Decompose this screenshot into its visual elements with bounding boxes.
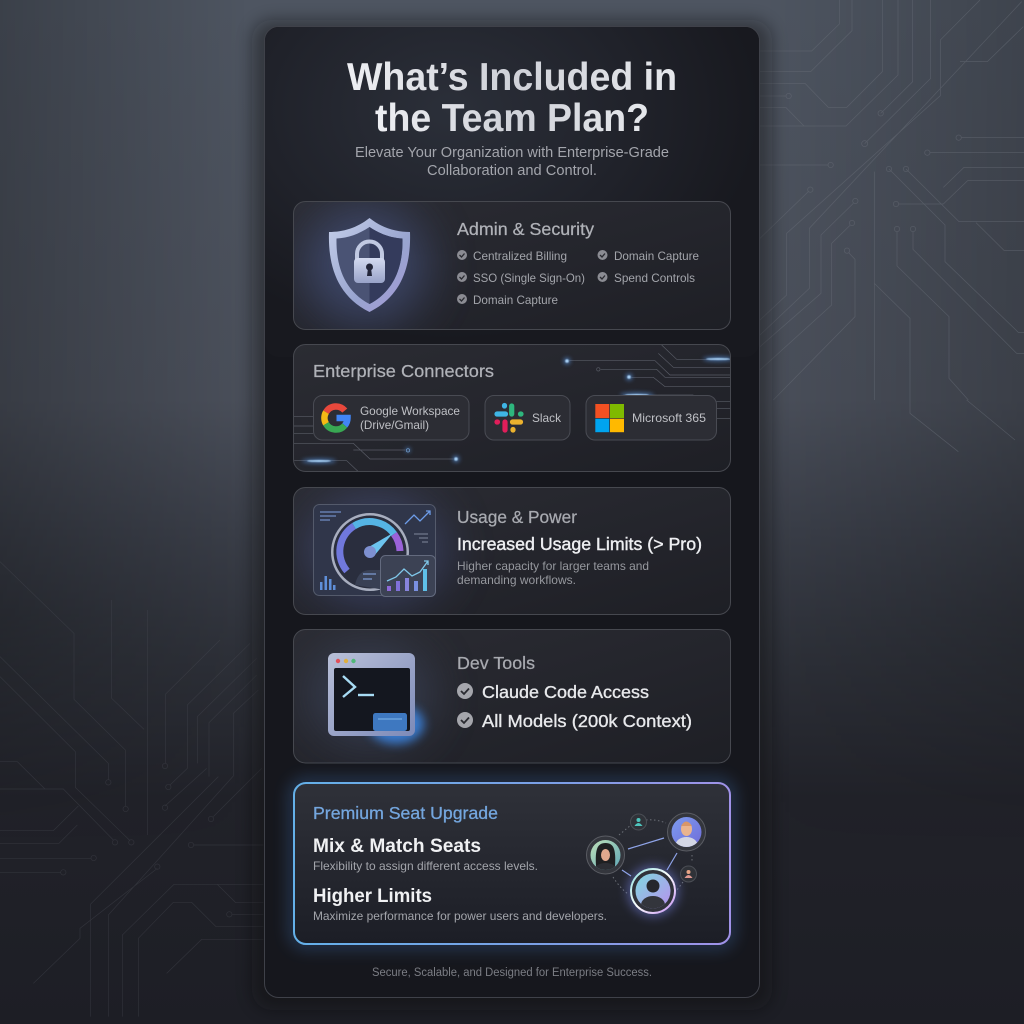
chip: google workspace	[314, 396, 469, 440]
heading: Dev Tools	[457, 653, 535, 673]
highlight: Increased Usage Limits (> Pro)	[457, 534, 702, 554]
feature list: SSO (Single Sign-On)	[473, 271, 585, 285]
title	[347, 56, 677, 140]
icon: microsoft logo	[595, 404, 624, 432]
background	[0, 0, 1024, 762]
benefit: higher limits	[313, 886, 607, 923]
feature list	[457, 249, 699, 307]
description: demanding workflows.	[457, 573, 576, 587]
circuit traces in connectors panel	[293, 345, 733, 472]
avatar: central user	[627, 865, 679, 917]
title: What’s Included in	[347, 56, 677, 99]
circuit pattern: upper right	[760, 0, 1024, 452]
main card	[264, 26, 760, 998]
feature list: All Models (200k Context)	[482, 711, 692, 731]
heading: Usage & Power	[457, 507, 577, 527]
subtitle	[355, 145, 669, 179]
icon: google logo	[324, 406, 348, 430]
benefit: mix and match: Mix & Match Seats	[313, 836, 481, 857]
feature list: Domain Capture	[473, 293, 558, 307]
benefit: higher limits: Higher Limits	[313, 886, 432, 907]
feature list: Domain Capture	[614, 249, 699, 263]
panel: dev tools	[294, 630, 730, 763]
benefit: mix and match: Flexibility to assign different access levels.	[313, 859, 538, 873]
feature list: Spend Controls	[614, 271, 695, 285]
icon: terminal window	[328, 653, 424, 744]
description: Higher capacity for larger teams and	[457, 559, 649, 573]
avatar: small orange	[680, 866, 696, 882]
title: the Team Plan?	[375, 97, 649, 140]
panel: premium seat upgrade	[294, 783, 730, 944]
chip: google workspace: Google Workspace	[360, 404, 460, 418]
feature list	[457, 682, 692, 731]
chip: microsoft 365: Microsoft 365	[632, 411, 706, 425]
footer note: Secure, Scalable, and Designed for Enterprise Success.	[372, 967, 652, 979]
chip: slack	[485, 396, 570, 440]
icon: connected users network	[586, 813, 706, 917]
subtitle: Elevate Your Organization with Enterprise-Grade	[355, 145, 669, 161]
icon: shield with padlock	[329, 218, 410, 312]
panel: enterprise connectors	[293, 344, 733, 472]
feature list: Claude Code Access	[482, 682, 649, 702]
heading: Enterprise Connectors	[313, 361, 494, 381]
icon: slack logo	[497, 406, 521, 430]
icon: speedometer dashboard	[314, 504, 436, 596]
chip: microsoft 365	[586, 396, 716, 440]
benefit: mix and match	[313, 836, 538, 873]
heading: Premium Seat Upgrade	[313, 803, 498, 823]
avatar: small teal	[630, 814, 646, 830]
feature list: Centralized Billing	[473, 249, 567, 263]
subtitle: Collaboration and Control.	[427, 163, 597, 179]
avatar: man	[668, 813, 706, 853]
panel: admin and security	[294, 202, 730, 330]
circuit pattern: lower left	[0, 562, 263, 1017]
benefit: higher limits: Maximize performance for power users and developers.	[313, 909, 607, 923]
panel: usage and power	[294, 488, 730, 614]
chip: slack: Slack	[532, 411, 562, 425]
description	[457, 559, 649, 587]
avatar: woman	[586, 836, 624, 879]
chip: google workspace: (Drive/Gmail)	[360, 418, 429, 432]
heading: Admin & Security	[457, 219, 594, 239]
card shadow	[252, 20, 772, 1010]
